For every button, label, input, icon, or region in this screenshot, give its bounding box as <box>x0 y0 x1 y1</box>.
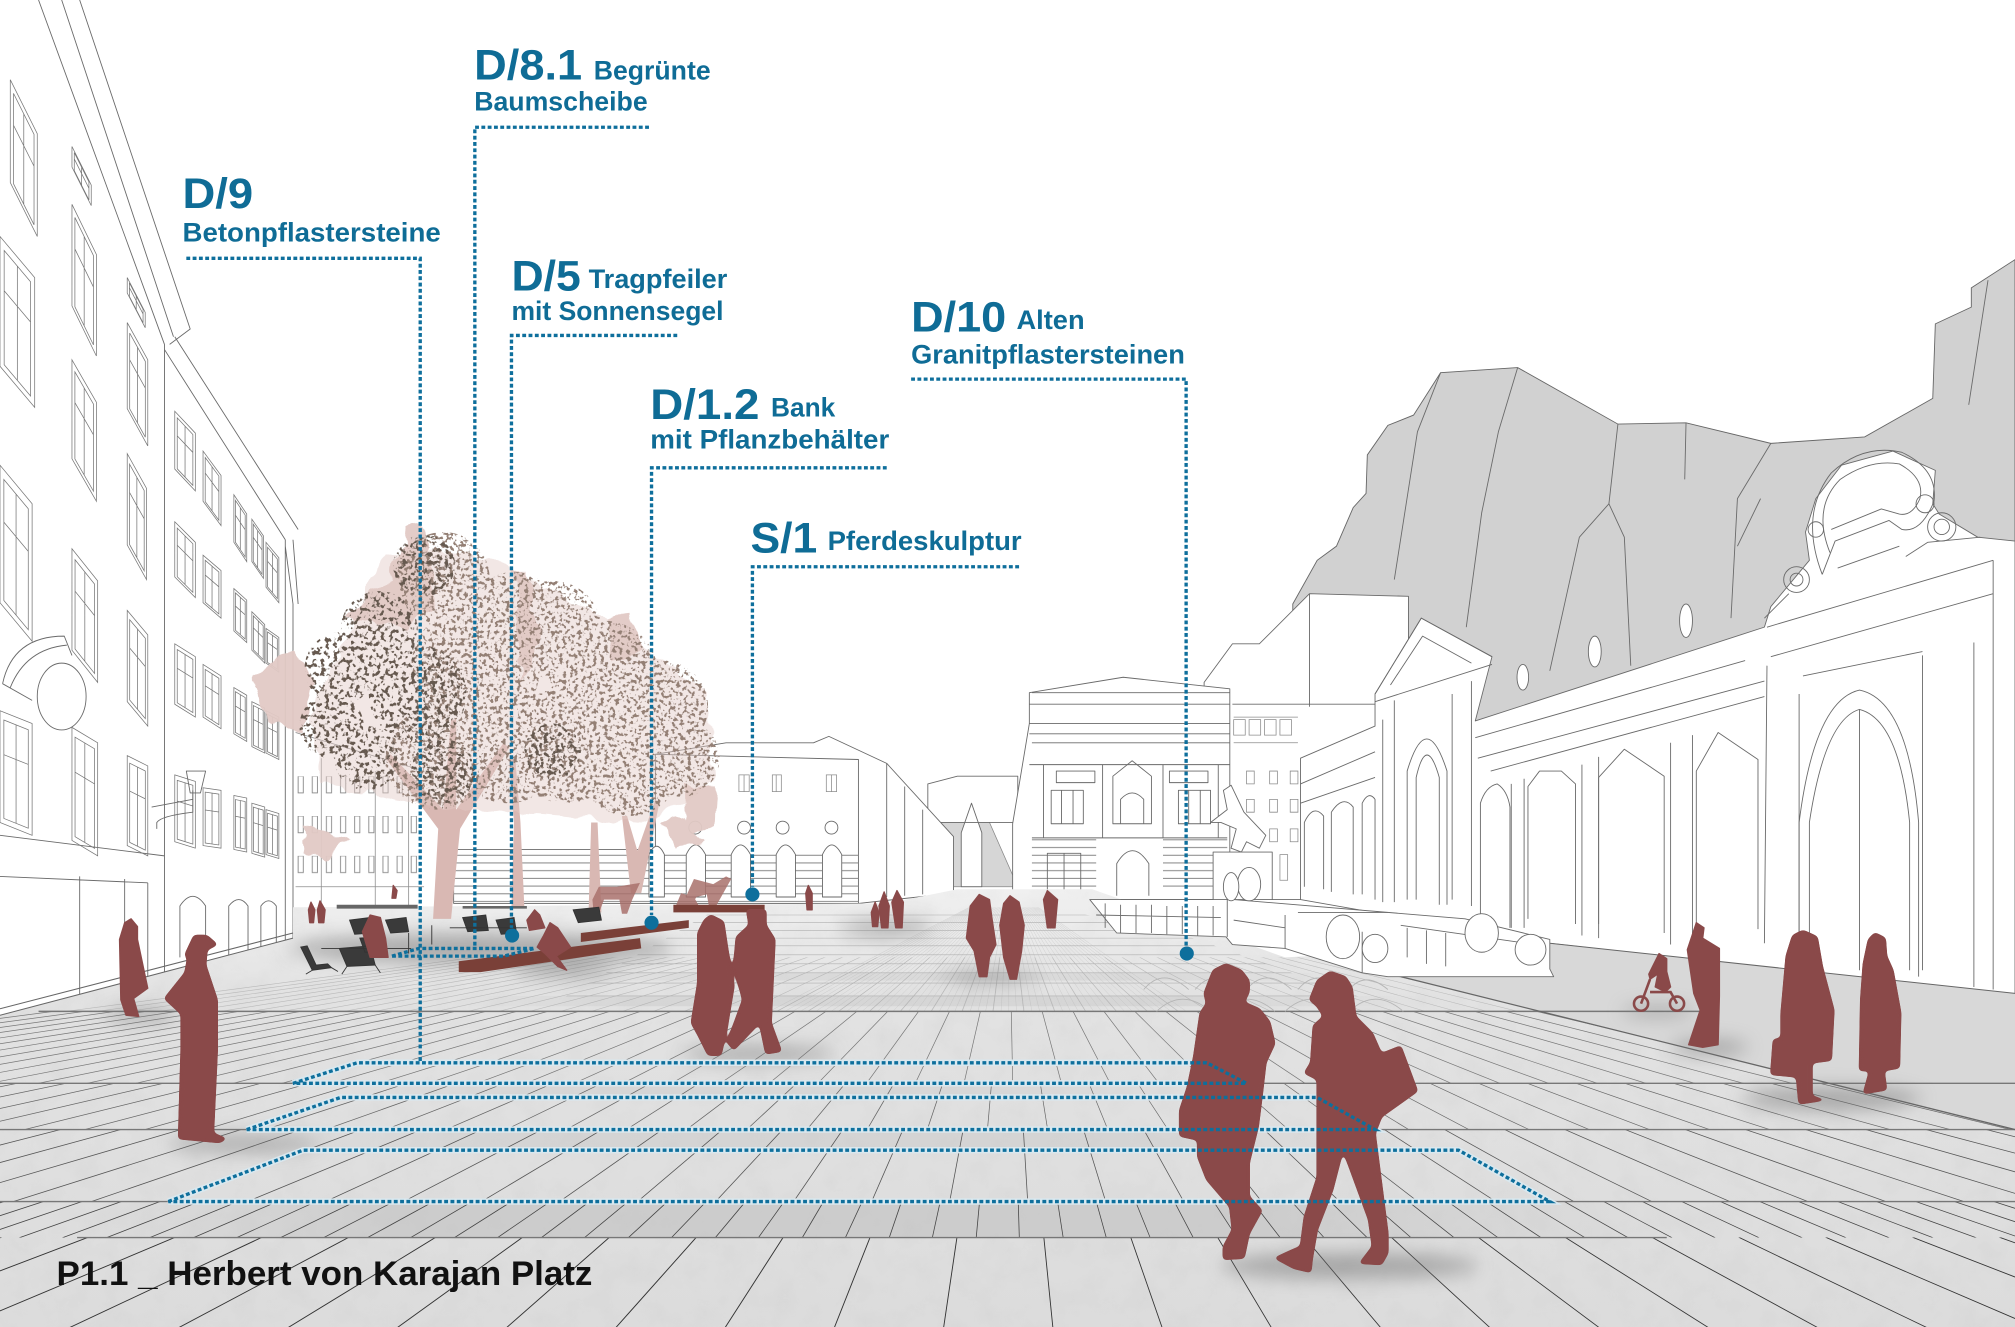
wall lamp <box>152 771 206 829</box>
horizontal joint lines <box>0 1011 2015 1238</box>
older woman <box>1860 933 1901 1094</box>
big arch <box>1799 690 1919 977</box>
woman with suitcase <box>1771 930 1834 1104</box>
arcaded wall with pediment and gate <box>1300 450 2015 996</box>
person: woman foreground left <box>1180 964 1275 1259</box>
ground shadows <box>105 920 1921 1279</box>
callout D/8.1 <box>392 42 711 956</box>
pediment scrolls <box>1764 450 1980 618</box>
couple far <box>966 894 1024 979</box>
hanging sign <box>37 663 86 730</box>
callout D/8.1: Baumscheibe <box>474 87 648 117</box>
cobble fan arcs <box>1144 978 1403 1011</box>
shaded pavement bands <box>77 1203 1667 1238</box>
callout D/9: Betonpflastersteine <box>182 218 441 248</box>
callout D/9 <box>182 170 441 1063</box>
callout S/1: Pferdeskulptur <box>828 526 1022 556</box>
paved floor <box>0 887 2015 1327</box>
callout S/1: S/1 <box>750 515 817 562</box>
horse statue <box>1213 852 1272 900</box>
distant left buildings <box>296 730 424 907</box>
dark foliage <box>299 535 581 803</box>
callout D/10 <box>911 294 1194 961</box>
trees <box>254 524 720 919</box>
gate <box>1375 618 1492 906</box>
horse sculptures <box>592 876 731 914</box>
callout D/10: Alten <box>1016 305 1085 335</box>
sidewalk kerb <box>1401 977 2015 1130</box>
child on balance bike <box>1634 954 1684 1011</box>
pavement area highlight <box>168 1063 1550 1202</box>
callout D/9: D/9 <box>182 170 253 217</box>
callout D/8.1: Begrünte <box>594 56 711 86</box>
family and distant figures <box>308 885 1058 970</box>
callout D/1.2: Bank <box>771 392 836 422</box>
distant hill and fort <box>928 776 1018 887</box>
callout D/1.2 <box>644 381 890 930</box>
couple centre <box>691 910 781 1055</box>
pavement area callout outlines <box>168 1063 1550 1202</box>
callout S/1 <box>745 515 1022 901</box>
people silhouettes <box>120 885 1901 1272</box>
callout D/8.1: D/8.1 <box>474 42 582 89</box>
light foliage <box>386 532 720 816</box>
callout D/5: Tragpfeiler <box>589 264 728 294</box>
wall finials <box>1517 664 1529 690</box>
perspective paving lines <box>0 887 2015 1327</box>
trunks <box>386 720 659 919</box>
callout D/1.2: mit Pflanzbehälter <box>650 425 890 455</box>
person: man with hat <box>164 936 226 1142</box>
blocks behind centre building <box>1204 594 1408 900</box>
callout D/1.2: D/1.2 <box>650 381 759 428</box>
callout D/5: mit Sonnensegel <box>511 296 723 326</box>
right sidewalk <box>1401 943 2015 1130</box>
man right <box>1687 923 1719 1047</box>
wall niches <box>1480 733 1758 933</box>
windows <box>0 80 279 858</box>
back centre building <box>454 736 954 903</box>
pink crown underlay <box>254 524 715 858</box>
callout D/10: D/10 <box>911 294 1006 341</box>
benches and cafe furniture <box>301 905 765 974</box>
horse fountain with balustrade <box>1090 785 1554 977</box>
callout D/5 <box>505 252 728 943</box>
person: woman with bag foreground <box>1275 972 1417 1272</box>
person: woman with phone <box>120 919 148 1017</box>
centre palace building <box>1013 677 1230 900</box>
left arcade <box>1300 752 1375 900</box>
title: P1.1 _ Herbert von Karajan Platz <box>57 1255 592 1293</box>
rock cliff <box>1293 260 2015 771</box>
callout D/5: D/5 <box>511 252 581 299</box>
left building <box>0 0 298 1022</box>
callout D/10: Granitpflastersteinen <box>911 340 1185 370</box>
